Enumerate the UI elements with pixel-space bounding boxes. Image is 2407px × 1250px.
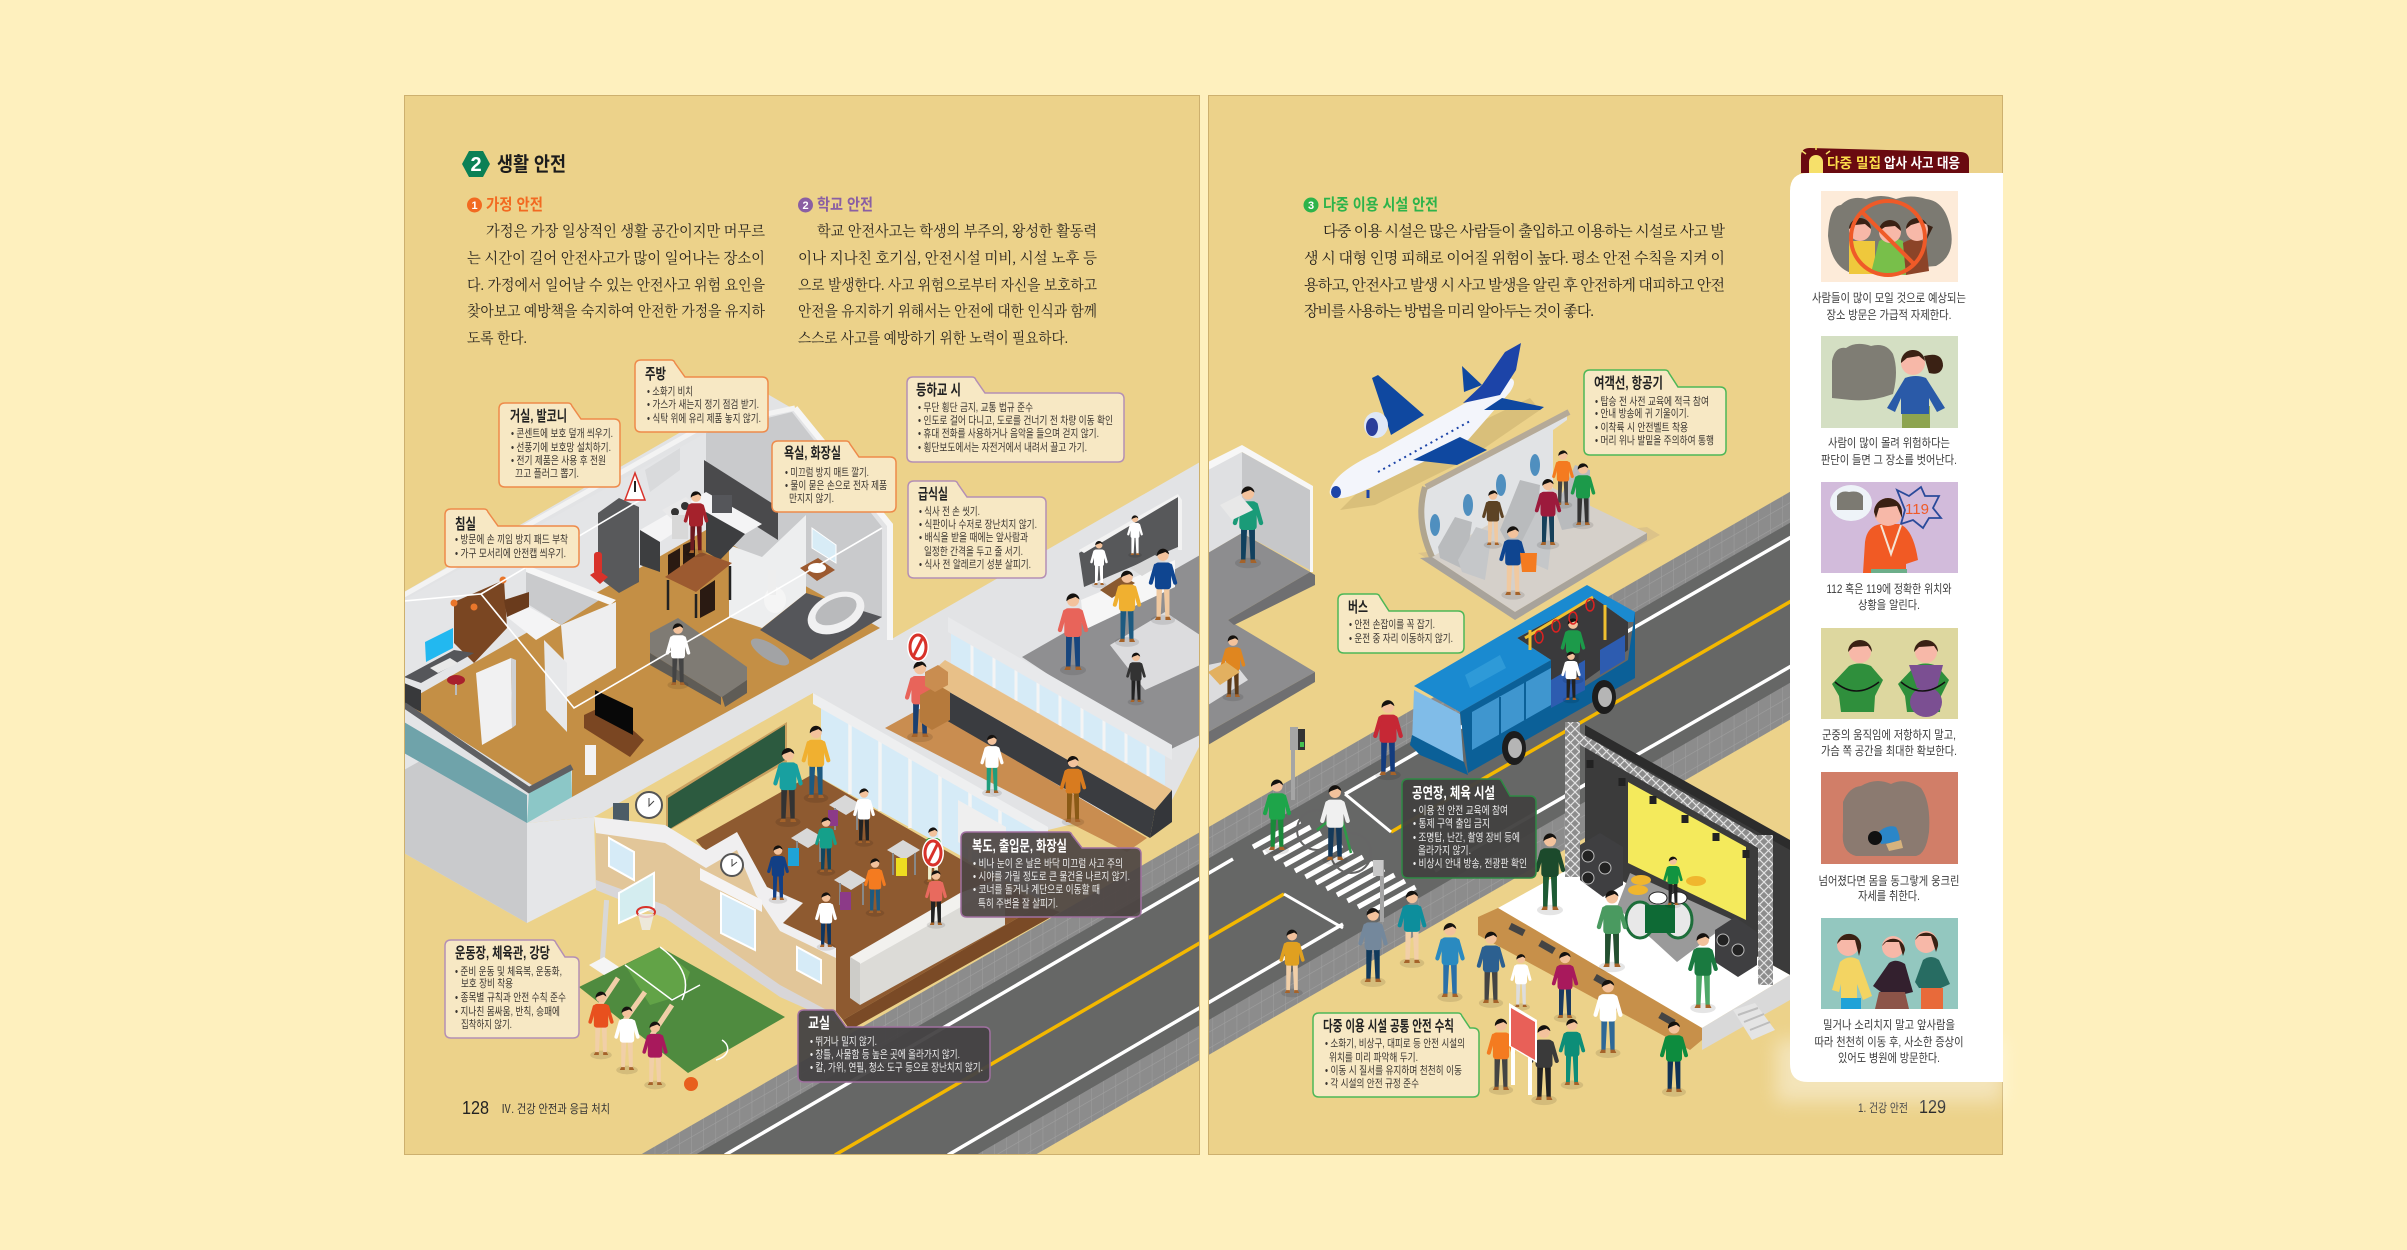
blackboard bbox=[666, 722, 787, 832]
callout: 거실, 발코니: • 전기 제품은 사용 후 전원 bbox=[511, 454, 606, 467]
callout: 다중 이용 시설 공통 안전 수칙: • 소화기, 비상구, 대피로 등 안전 시설의 bbox=[1325, 1037, 1465, 1050]
callout: 다중 이용 시설 공통 안전 수칙 bbox=[1313, 1013, 1479, 1097]
stage bbox=[1478, 725, 1790, 1050]
text block: 학교 안전: 이나 지나친 호기심, 안전시설 미비, 시설 노후 등 bbox=[798, 249, 1097, 267]
caption 6: 있어도 병원에 방문한다. bbox=[1838, 1051, 1940, 1065]
page: right bbox=[1208, 96, 2002, 1154]
people: corridor bbox=[907, 661, 1084, 826]
page: left bbox=[404, 96, 1200, 1154]
callout: 버스: • 운전 중 자리 이동하지 않기. bbox=[1349, 631, 1453, 645]
callout: 여객선, 항공기: • 이착륙 시 안전벨트 착용 bbox=[1595, 421, 1688, 434]
callout: 급식실: 일정한 간격을 두고 줄 서기. bbox=[924, 544, 1023, 558]
callout: 운동장, 체육관, 강당: 보호 장비 착용 bbox=[461, 977, 513, 990]
callout: 욕실, 화장실: 욕실, 화장실 bbox=[784, 445, 841, 462]
callout: 공연장, 체육 시설: • 통제 구역 출입 금지 bbox=[1413, 817, 1490, 830]
callout: 침실 bbox=[445, 509, 579, 567]
callout: 침실: • 가구 모서리에 안전캡 씌우기. bbox=[455, 547, 566, 560]
callout: 등하교 시: • 인도로 걸어 다니고, 도로를 건너기 전 차량 이동 확인 bbox=[918, 414, 1113, 427]
sidebar glow bbox=[1776, 1040, 2003, 1102]
caption 3 bbox=[1826, 582, 1952, 612]
callout: 운동장, 체육관, 강당 bbox=[445, 940, 579, 1038]
callout: 교실: • 창틀, 사물함 등 높은 곳에 올라가지 않기. bbox=[810, 1048, 960, 1061]
corridor lockers bbox=[925, 660, 1172, 838]
callout: 욕실, 화장실: • 물이 묻은 손으로 전자 제품 bbox=[785, 479, 887, 492]
icon: warning triangle bbox=[625, 473, 645, 500]
icon: fire extinguisher bbox=[590, 552, 608, 584]
players stretching bbox=[590, 978, 672, 1089]
text block: 다중 이용 시설 안전: 생 시 대형 인명 피해로 이어질 위험이 높다. 평소 안전 수칙을 지켜 이 bbox=[1304, 249, 1725, 267]
truss bbox=[1565, 722, 1773, 985]
callout: 교실: • 뛰거나 밀지 않기. bbox=[810, 1035, 877, 1048]
caption 5 bbox=[1818, 874, 1960, 903]
desk with monitor bbox=[404, 628, 474, 712]
caption 6: 밀거나 소리치지 말고 앞사람을 bbox=[1823, 1018, 1955, 1032]
section heading: 생활 안전 bbox=[462, 151, 566, 177]
illustration 3: call 119 bbox=[1821, 482, 1958, 573]
airplane cabin cross-section bbox=[1418, 412, 1660, 620]
text block: 다중 이용 시설 안전: 장비를 사용하는 방법을 미리 알아두는 것이 좋다. bbox=[1304, 302, 1594, 320]
icon: prohibition corridor bbox=[907, 632, 929, 662]
classroom floor bbox=[696, 774, 1040, 1020]
icon: siren bbox=[1802, 145, 1830, 173]
highlight lines bbox=[404, 500, 882, 708]
text block: 가정 안전: 찾아보고 예방책을 숙지하여 안전한 가정을 유지하 bbox=[467, 302, 765, 320]
icon: prohibition classroom bbox=[922, 838, 944, 868]
callout: 주방: • 소화기 비치 bbox=[647, 385, 693, 398]
callout: 운동장, 체육관, 강당: 집착하지 않기. bbox=[461, 1017, 512, 1031]
caption 6 bbox=[1814, 1018, 1964, 1065]
caption 4: 가슴 쪽 공간을 최대한 확보한다. bbox=[1821, 744, 1957, 758]
illustration 3: call 119: 119 bbox=[1905, 501, 1929, 518]
fridge bbox=[598, 498, 639, 593]
caption 6: 따라 천천히 이동 후, 사소한 증상이 bbox=[1814, 1034, 1964, 1049]
callout: 운동장, 체육관, 강당: • 지나친 몸싸움, 반칙, 승패에 bbox=[455, 1005, 560, 1018]
caption 2 bbox=[1821, 436, 1957, 467]
callout: 거실, 발코니: • 콘센트에 보호 덮개 씌우기. bbox=[511, 427, 613, 440]
traffic signal second bbox=[1373, 860, 1384, 922]
callout: 운동장, 체육관, 강당: • 종목별 규칙과 안전 수칙 준수 bbox=[455, 991, 566, 1004]
illustration 5: curl up bbox=[1821, 772, 1958, 864]
caption 1: 장소 방문은 가급적 자제한다. bbox=[1826, 308, 1952, 322]
text block: 가정 안전 bbox=[467, 222, 765, 347]
callout: 욕실, 화장실: • 미끄럼 방지 매트 깔기. bbox=[785, 465, 869, 479]
callout: 복도, 출입문, 화장실: 복도, 출입문, 화장실 bbox=[972, 838, 1067, 855]
illustration: left page school and home bbox=[404, 388, 1200, 1091]
callout: 주방: • 식탁 위에 유리 제품 놓지 않기. bbox=[647, 412, 761, 425]
cafeteria annex bbox=[1208, 445, 1315, 745]
callout: 급식실: 급식실 bbox=[918, 486, 948, 503]
crosswalk bbox=[1253, 821, 1416, 913]
callout: 복도, 출입문, 화장실: • 비나 눈이 온 날은 바닥 미끄럼 사고 주의 bbox=[973, 857, 1123, 870]
panel: crowd response sidebar bbox=[1790, 173, 2003, 1082]
kitchen cabinets bbox=[640, 448, 778, 572]
callout: 교실: 교실 bbox=[808, 1015, 830, 1032]
page number: 128: 128 bbox=[462, 1098, 489, 1118]
safety sign board bbox=[1509, 1003, 1537, 1095]
page number: 128: Ⅳ. 건강 안전과 응급 처치 bbox=[501, 1102, 610, 1116]
callout: 급식실: • 배식을 받을 때에는 앞사람과 bbox=[919, 531, 1028, 544]
subheading: 학교 안전 bbox=[798, 196, 873, 214]
sofa bbox=[650, 618, 747, 707]
crowd bbox=[1360, 891, 1686, 1105]
section heading: 생활 안전: 2 bbox=[470, 154, 482, 176]
caption 5: 자세를 취한다. bbox=[1858, 889, 1920, 903]
text block: 가정 안전: 다. 가정에서 일어날 수 있는 안전사고 위험 요인을 bbox=[467, 276, 765, 294]
callout: 여객선, 항공기: • 안내 방송에 귀 기울이기. bbox=[1595, 407, 1689, 420]
caption 1 bbox=[1812, 291, 1966, 322]
airplane bbox=[1330, 343, 1544, 510]
subheading: 가정 안전: 가정 안전 bbox=[486, 196, 543, 214]
illustration 1: avoid crowded places bbox=[1821, 191, 1958, 282]
classroom clock and speaker bbox=[613, 792, 662, 823]
callout: 공연장, 체육 시설: • 이용 전 안전 교육에 참여 bbox=[1413, 804, 1508, 817]
brown base under classroom bbox=[843, 905, 1060, 1030]
callout: 주방: 주방 bbox=[645, 366, 666, 383]
callout: 공연장, 체육 시설 bbox=[1402, 779, 1536, 878]
callout: 여객선, 항공기: • 탑승 전 사전 교육에 적극 참여 bbox=[1595, 395, 1709, 408]
callout: 급식실: • 식판이나 수저로 장난치지 않기. bbox=[919, 518, 1037, 531]
callout: 여객선, 항공기: 여객선, 항공기 bbox=[1594, 375, 1663, 392]
people: apartment bbox=[668, 491, 706, 689]
caption 4 bbox=[1821, 728, 1957, 758]
corridor wood floor bbox=[885, 706, 1147, 852]
callout: 복도, 출입문, 화장실: 특히 주변을 잘 살피기. bbox=[978, 896, 1058, 910]
callout: 교실 bbox=[798, 1010, 990, 1082]
callout: 욕실, 화장실 bbox=[772, 441, 896, 512]
text block: 가정 안전: 가정은 가장 일상적인 생활 공간이지만 머무르 bbox=[486, 222, 765, 240]
caption 1: 사람들이 많이 모일 것으로 예상되는 bbox=[1812, 291, 1966, 305]
callout: 공연장, 체육 시설: • 비상시 안내 방송, 전광판 확인 bbox=[1413, 857, 1527, 870]
subheading: 학교 안전: 2 bbox=[802, 200, 809, 212]
subheading: 가정 안전: 1 bbox=[471, 200, 478, 212]
apartment interior walls bbox=[706, 412, 882, 617]
callout: 운동장, 체육관, 강당: 운동장, 체육관, 강당 bbox=[455, 945, 550, 962]
caption 2: 사람이 많이 몰려 위험하다는 bbox=[1828, 436, 1950, 450]
subheading: 다중 이용 시설 안전: 3 bbox=[1308, 200, 1314, 212]
bathroom tile bbox=[760, 593, 882, 660]
icon: bathroom fixtures bbox=[750, 527, 864, 666]
apartment floor bbox=[404, 530, 880, 797]
callout: 버스 bbox=[1338, 594, 1464, 653]
callout: 다중 이용 시설 공통 안전 수칙: 다중 이용 시설 공통 안전 수칙 bbox=[1323, 1018, 1454, 1035]
callout: 침실: • 방문에 손 끼임 방지 패드 부착 bbox=[455, 533, 568, 546]
bedroom partition bbox=[476, 565, 616, 745]
wall outlet bbox=[585, 745, 596, 775]
page number: 128 bbox=[462, 1098, 610, 1118]
sidebar tab: 다중 밀집 압사 사고 대응: 다중 밀집 bbox=[1827, 155, 1881, 171]
callout: 다중 이용 시설 공통 안전 수칙: • 이동 시 질서를 유지하며 천천히 이동 bbox=[1325, 1063, 1462, 1077]
page number: 129: 1. 건강 안전 bbox=[1858, 1101, 1908, 1115]
callout: 공연장, 체육 시설: 올라가지 않기. bbox=[1418, 844, 1471, 857]
school facade bbox=[594, 817, 836, 1022]
sidebar tab: 다중 밀집 압사 사고 대응: 압사 사고 대응 bbox=[1884, 155, 1960, 171]
callout: 다중 이용 시설 공통 안전 수칙: • 각 시설의 안전 규정 준수 bbox=[1325, 1077, 1419, 1090]
caption 5: 넘어졌다면 몸을 동그랗게 웅크린 bbox=[1818, 874, 1960, 888]
callout: 등하교 시: • 횡단보도에서는 자전거에서 내려서 끌고 가기. bbox=[918, 441, 1087, 454]
caption 3: 상황을 알린다. bbox=[1858, 598, 1920, 612]
callout: 주방: • 가스가 새는지 정기 점검 받기. bbox=[647, 398, 759, 411]
text block: 학교 안전 bbox=[798, 222, 1097, 347]
callout: 거실, 발코니: 끄고 플러그 뽑기. bbox=[515, 467, 579, 480]
callout: 급식실: • 식사 전 손 씻기. bbox=[919, 505, 980, 518]
callout: 침실: 침실 bbox=[455, 516, 476, 533]
apartment outer walls bbox=[404, 388, 1200, 923]
callout: 복도, 출입문, 화장실: • 시야를 가릴 정도로 큰 물건을 나르지 않기. bbox=[973, 870, 1130, 883]
text block: 학교 안전: 스스로 사고를 예방하기 위한 노력이 필요하다. bbox=[798, 329, 1068, 347]
text block: 가정 안전: 도록 한다. bbox=[467, 329, 527, 347]
page number: 129: 129 bbox=[1919, 1097, 1946, 1117]
speakers bbox=[1580, 833, 1757, 977]
illustration 6: move slowly bbox=[1821, 918, 1958, 1009]
caption 2: 판단이 들면 그 장소를 벗어난다. bbox=[1821, 453, 1957, 467]
sidebar tab: 다중 밀집 압사 사고 대응 bbox=[1801, 145, 1969, 173]
callout: 복도, 출입문, 화장실 bbox=[961, 832, 1141, 917]
section heading: 생활 안전: 생활 안전 bbox=[497, 153, 566, 176]
text block: 학교 안전: 으로 발생한다. 사고 위험으로부터 자신을 보호하고 bbox=[798, 276, 1097, 294]
illustration 2: leave the place bbox=[1821, 336, 1958, 428]
subheading: 다중 이용 시설 안전: 다중 이용 시설 안전 bbox=[1323, 196, 1438, 214]
cafeteria window wall bbox=[951, 634, 1172, 785]
performers bbox=[1537, 833, 1716, 1013]
illustration 4: keep chest space bbox=[1821, 628, 1958, 719]
cafeteria back wall and floor bbox=[1022, 494, 1200, 752]
subheading: 학교 안전: 학교 안전 bbox=[817, 196, 873, 214]
callout: 여객선, 항공기: • 머리 위나 발밑을 주의하여 통행 bbox=[1595, 433, 1714, 447]
callout: 급식실 bbox=[908, 481, 1046, 578]
drum kit bbox=[1626, 875, 1706, 938]
traffic signal bbox=[1290, 727, 1305, 800]
cyclist bbox=[1297, 785, 1371, 873]
callout: 등하교 시 bbox=[907, 377, 1124, 462]
callout: 복도, 출입문, 화장실: • 코너를 돌거나 계단으로 이동할 때 bbox=[973, 883, 1100, 896]
callout: 욕실, 화장실: 만지지 않기. bbox=[789, 492, 834, 505]
text block: 학교 안전: 학교 안전사고는 학생의 부주의, 왕성한 활동력 bbox=[817, 222, 1097, 240]
callout: 등하교 시: 등하교 시 bbox=[916, 382, 961, 399]
callout: 교실: • 칼, 가위, 연필, 청소 도구 등으로 장난치지 않기. bbox=[810, 1061, 983, 1074]
callout: 버스: • 안전 손잡이를 꼭 잡기. bbox=[1349, 618, 1435, 631]
callout: 여객선, 항공기 bbox=[1584, 370, 1726, 455]
dining table bbox=[665, 540, 732, 618]
classroom window wall bbox=[813, 693, 1048, 856]
text block: 학교 안전: 안전을 유지하기 위해서는 안전에 대한 인식과 함께 bbox=[798, 302, 1097, 320]
classroom desks bbox=[788, 795, 920, 910]
callout: 운동장, 체육관, 강당: • 준비 운동 및 체육복, 운동화, bbox=[455, 965, 562, 978]
text block: 다중 이용 시설 안전: 다중 이용 시설은 많은 사람들이 출입하고 이용하는 시설로 사고 발 bbox=[1323, 222, 1726, 240]
TV and stand bbox=[584, 690, 644, 757]
text block: 다중 이용 시설 안전 bbox=[1304, 222, 1726, 320]
callout: 급식실: • 식사 전 알레르기 성분 살피기. bbox=[919, 557, 1031, 571]
classroom half walls bbox=[850, 876, 1005, 1005]
caption 3: 112 혹은 119에 정확한 위치와 bbox=[1826, 582, 1952, 596]
basketball court bbox=[579, 947, 785, 1073]
subheading: 가정 안전 bbox=[467, 196, 543, 214]
callout: 등하교 시: • 무단 횡단 금지, 교통 법규 준수 bbox=[918, 401, 1033, 414]
callout: 거실, 발코니 bbox=[499, 403, 620, 487]
callout: 다중 이용 시설 공통 안전 수칙: 위치를 미리 파악해 두기. bbox=[1329, 1050, 1418, 1064]
caption 4: 군중의 움직임에 저항하지 말고, bbox=[1822, 728, 1956, 742]
text block: 다중 이용 시설 안전: 용하고, 안전사고 발생 시 사고 발생을 알린 후 안전하게 대피하고 안전 bbox=[1304, 276, 1725, 294]
page number: 129 bbox=[1858, 1097, 1946, 1117]
balcony railing bbox=[404, 705, 572, 823]
icon: basketball bbox=[684, 1077, 698, 1091]
callout: 주방 bbox=[635, 360, 768, 432]
callout: 거실, 발코니: • 선풍기에 보호망 설치하기. bbox=[511, 440, 611, 454]
bed and wardrobe bbox=[450, 576, 561, 663]
callout: 거실, 발코니: 거실, 발코니 bbox=[510, 408, 567, 425]
text block: 가정 안전: 는 시간이 길어 안전사고가 많이 일어나는 장소이 bbox=[467, 249, 765, 267]
callout: 공연장, 체육 시설: 공연장, 체육 시설 bbox=[1412, 785, 1495, 802]
callout: 등하교 시: • 휴대 전화를 사용하거나 음악을 들으며 걷지 않기. bbox=[918, 426, 1099, 440]
pedestrians on the street bbox=[1265, 700, 1401, 997]
people: cafeteria bbox=[1060, 515, 1175, 705]
callout: 버스: 버스 bbox=[1348, 599, 1368, 616]
bus bbox=[1410, 585, 1635, 775]
illustration: right page bbox=[1208, 343, 1790, 1105]
callout: 공연장, 체육 시설: • 조명탑, 난간, 촬영 장비 등에 bbox=[1413, 831, 1520, 844]
basketball hoop bbox=[589, 873, 655, 975]
people: classroom bbox=[769, 726, 945, 951]
road across both pages bbox=[640, 486, 1800, 1155]
